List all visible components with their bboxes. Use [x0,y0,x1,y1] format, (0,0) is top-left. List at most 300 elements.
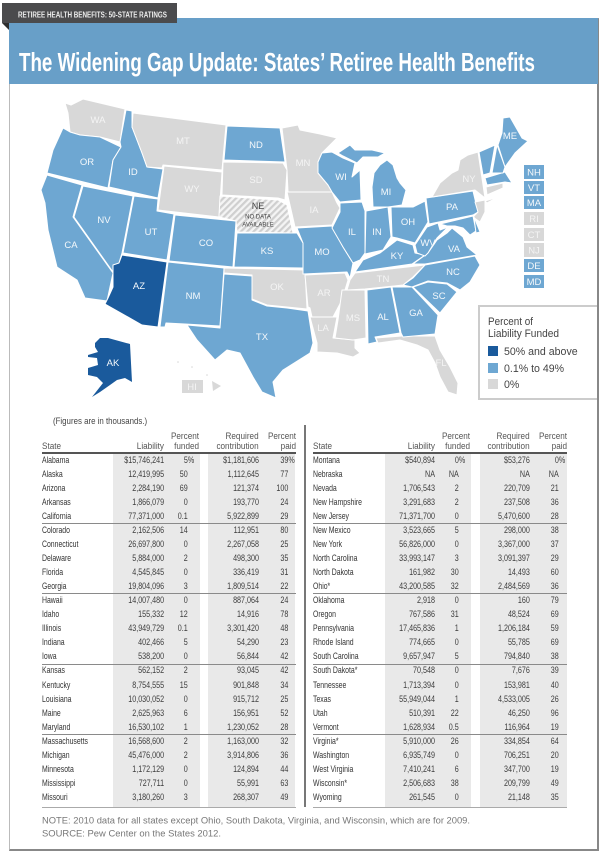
required contribution column: 5,470,600 [498,511,530,521]
required contribution column: 93,045 [237,665,259,675]
liability column: 2,918 [417,595,435,605]
state: IN: IN [372,227,382,238]
state: NM: NM [186,291,200,302]
state: IA [287,192,340,227]
percent funded column: 2 [455,497,459,507]
liability column: 12,419,995 [128,469,164,479]
state names column [313,455,362,802]
state names column: Iowa [42,651,57,661]
state: IL: IL [348,227,356,238]
state names column: Missouri [42,792,68,802]
state names column: Idaho [42,609,59,619]
liability column: 19,804,096 [128,581,164,591]
small northeast state boxes: RI [529,214,539,225]
percent paid column: 29 [551,553,559,563]
table: Alabama to Missouri [42,431,296,808]
liability column: 2,284,190 [132,483,164,493]
state names column: Maryland [42,722,70,732]
required contribution column: 3,301,420 [227,623,259,633]
required contribution column: 3,091,397 [498,553,530,563]
state: NY: NY [462,174,476,185]
liability column: 9,657,947 [403,651,435,661]
state names column: Mississippi [42,778,75,788]
required contribution column: $53,276 [504,455,530,465]
percent funded column: 3 [184,581,188,591]
state names column: Colorado [42,525,70,535]
state: OR: OR [80,157,94,168]
state: AZ: AZ [133,281,145,292]
percent funded column: 0 [184,651,188,661]
legend panel: 0% [504,379,520,391]
state names column: Nebraska [313,469,342,479]
state names column: Virginia* [313,736,339,746]
state names column: Rhode Island [313,637,354,647]
percent funded column: 15 [180,680,188,690]
state names column: North Dakota [313,567,354,577]
state names column: Delaware [42,553,71,563]
percent funded column: 0 [455,511,459,521]
state names column: Georgia [42,581,67,591]
percent funded column: 2 [455,483,459,493]
required contribution column: 298,000 [504,525,530,535]
state: MO [297,226,353,278]
state names column: Michigan [42,750,70,760]
required contribution column: 124,894 [233,764,259,774]
state: NC: NC [446,267,460,278]
state: WA [65,99,125,142]
liability column: 767,586 [409,609,435,619]
percent paid column: 77 [280,469,288,479]
liability column: 77,371,000 [128,511,164,521]
state: OH: OH [401,217,415,228]
state: KS [234,233,303,268]
state: MN [282,125,337,192]
percent paid column: 35 [280,553,288,563]
state: AK: AK [107,358,120,369]
section tag [2,3,177,30]
state: NY [432,152,498,203]
state: IA: IA [310,205,319,216]
percent paid column: 36 [551,581,559,591]
state names column: Florida [42,567,63,577]
state: ME [498,117,528,167]
state: FL [376,336,458,395]
state: NE, no data [219,196,293,233]
state names column: Vermont [313,722,339,732]
state names column: Alaska [42,469,63,479]
percent paid column: 49 [551,778,559,788]
liability column: 774,665 [409,637,435,647]
required contribution column: 220,709 [504,483,530,493]
liability column: 26,697,800 [128,539,164,549]
percent funded column: 38 [451,778,459,788]
state names column: Arizona [42,483,65,493]
table header: Percent [442,431,470,442]
required contribution column: 160 [518,595,530,605]
percent paid column: 36 [551,497,559,507]
required contribution column: 794,840 [504,651,530,661]
liability column: 1,866,079 [132,497,164,507]
required contribution column: 1,809,514 [227,581,259,591]
percent paid column: 24 [280,497,288,507]
state names column: West Virginia [313,764,353,774]
percent paid column: 100 [276,483,288,493]
state: NE, no data: NO DATA [245,214,271,220]
percent funded column: 0 [184,539,188,549]
percent funded column: 50 [180,469,188,479]
required contribution column: 237,508 [504,497,530,507]
percent funded column: 0 [455,637,459,647]
state: LA [310,317,360,357]
state names column: Massachusetts [42,736,88,746]
percent paid column: 23 [280,637,288,647]
liability column: 402,466 [138,637,164,647]
state: NH [492,145,505,173]
state names column: Illinois [42,623,61,633]
small northeast state boxes: NH [527,168,541,178]
liability column: 2,506,683 [403,778,435,788]
percent paid column: 79 [551,595,559,605]
small northeast state boxes [524,165,544,288]
state: WI: WI [335,172,347,183]
legend panel: Percent of [488,316,534,328]
table header: paid [552,441,567,452]
state names column: Nevada [313,483,337,493]
state: GA [392,287,438,337]
required contribution column: 116,964 [505,722,530,732]
footnote: note and source: NOTE: 2010 data for all states except Ohio, South Dakota, Virginia, and Wisconsin, which are for 2009. [42,816,470,826]
percent funded column: 1 [184,722,188,732]
percent funded column: 2 [184,736,188,746]
percent funded column: 3 [455,553,459,563]
required contribution column: 498,300 [233,553,259,563]
state: CT and RI [486,183,503,195]
liability column: 6,935,749 [403,750,435,760]
table header: Liability [137,441,164,452]
percent funded column: 3 [184,792,188,802]
state: NE, no data: AVAILABLE [242,222,274,228]
state: MA [485,172,512,185]
required contribution column: 14,916 [237,609,259,619]
required contribution column: 193,770 [233,497,259,507]
state: TN [347,265,425,290]
state: FL: FL [435,358,447,369]
state names column: Minnesota [42,764,74,774]
state: WV [415,223,448,256]
percent paid column: 48 [280,623,288,633]
percent funded column: NA [449,469,459,479]
state names column: Wisconsin* [313,778,347,788]
liability column: 70,548 [413,665,435,675]
required contribution column: 1,163,000 [227,736,259,746]
state: NC [403,256,480,290]
liability column: 55,949,044 [399,694,435,704]
state: SD: SD [249,175,263,186]
percent funded column: 0 [455,539,459,549]
percent funded column: 5 [455,525,459,535]
state: MS [335,290,366,340]
percent funded column: 0 [184,778,188,788]
table header: contribution [488,441,530,452]
map of the United States [42,100,544,397]
percent paid column: 40 [551,680,559,690]
table: Montana to Wyoming: 0% [555,455,565,465]
state: WY [158,166,222,217]
liability column: 4,545,845 [132,567,164,577]
state: MO: MO [314,247,330,258]
percent funded column: 2 [184,750,188,760]
state names column: Texas [313,694,331,704]
percent paid column: 19 [551,764,559,774]
state: CO [169,215,236,267]
state: MT [132,113,226,170]
required contribution column: 2,267,058 [227,539,259,549]
state: NV [74,186,133,272]
required contribution column: 14,493 [508,567,530,577]
title banner [9,18,598,84]
table header: Liability [408,441,435,452]
required contribution column: 1,112,645 [228,469,259,479]
state: AK [88,338,132,397]
required contribution column: 56,844 [237,651,259,661]
liability column: 3,180,260 [132,792,164,802]
required contribution column: 112,951 [234,525,259,535]
required contribution column: 915,712 [233,694,259,704]
percent funded column [178,455,194,802]
percent funded column: 69 [180,483,188,493]
percent funded column: 0 [455,792,459,802]
legend panel: 50% and above [504,346,578,358]
state: VA: VA [448,244,461,255]
required contribution column: 7,676 [512,665,530,675]
required contribution column: 1,230,052 [227,722,259,732]
table header [42,431,296,452]
percent paid column: 60 [551,567,559,577]
percent funded column: 0.1 [178,511,188,521]
state: OK: OK [270,282,285,293]
state: WV: WV [420,238,436,249]
liability column: $15,746,241 [124,455,164,465]
legend panel [478,305,597,400]
state names column: Arkansas [42,497,71,507]
state: SD [222,162,287,200]
percent funded column: 5 [455,651,459,661]
small northeast state boxes: CT [528,230,541,241]
state: PA: PA [446,202,459,213]
liability column: 10,030,052 [128,694,164,704]
percent paid column: 69 [551,637,559,647]
required contribution column: 48,524 [508,609,530,619]
percent funded column: 2 [184,665,188,675]
percent paid column: 25 [280,694,288,704]
state: CA: CA [64,240,78,251]
percent funded column: 26 [451,736,459,746]
state names column: Kansas [42,665,65,675]
state: AZ [105,255,167,327]
required contribution column: 55,785 [508,637,530,647]
liability column: 3,291,683 [403,497,435,507]
percent funded column: 30 [451,567,459,577]
percent paid column: 21 [551,483,559,493]
required contribution column: 121,374 [233,483,259,493]
required contribution column: 156,951 [233,708,259,718]
state: HI [177,361,221,393]
state: TX [187,274,313,398]
percent paid column: 38 [551,651,559,661]
liability column: 727,711 [139,778,164,788]
percent paid column: 22 [280,581,288,591]
state names column: Washington [313,750,349,760]
state: UT [123,196,174,260]
liability column: 562,152 [138,665,164,675]
liability column: 1,628,934 [403,722,435,732]
state names column: New Mexico [313,525,351,535]
liability column: 17,465,836 [399,623,435,633]
required contribution column: 887,064 [233,595,259,605]
liability column: 2,625,963 [132,708,164,718]
state: IN [365,207,391,254]
table caption: (Figures are in thousands.) [53,415,147,426]
table header: Required [226,431,259,442]
state: SC: SC [432,291,446,302]
state: ID: ID [128,167,138,178]
state names column: South Dakota* [313,665,357,675]
state: GA: GA [409,308,424,319]
required contribution column: 706,251 [504,750,530,760]
state: NE, no data: NE [252,201,264,211]
table header: Required [497,431,530,442]
table header: Percent [539,431,567,442]
liability column: 16,530,102 [128,722,164,732]
percent paid column: 49 [280,792,288,802]
percent paid column: 64 [551,736,559,746]
state: ME: ME [503,131,517,142]
table: Alabama to Missouri: 5% [184,455,194,465]
percent paid column: 42 [280,651,288,661]
state names column: South Carolina [313,651,359,661]
percent paid column: 44 [280,764,288,774]
state names column: California [42,511,71,521]
state: WY: WY [184,184,200,195]
table: Montana to Wyoming: 0% [455,455,465,465]
state: VA [413,228,477,264]
liability column: 43,949,729 [128,623,164,633]
state names column: Tennessee [313,680,346,690]
state: DE [474,217,480,233]
small northeast state boxes: VT [528,183,540,194]
table header: funded [445,441,470,452]
percent paid column: 19 [551,722,559,732]
liability column: 16,568,600 [128,736,164,746]
footnote: note and source [42,816,470,840]
percent funded column: 12 [180,609,188,619]
required contribution column: 54,290 [237,637,259,647]
state: MI: MI [381,187,391,198]
state: WA: WA [91,115,106,126]
percent paid column: NA [549,469,559,479]
state: KS: KS [261,246,273,257]
liability column: 538,200 [138,651,164,661]
liability column: 5,910,000 [403,736,435,746]
percent paid column: 20 [551,750,559,760]
small northeast state boxes: MD [527,277,542,288]
liability column [124,455,164,802]
percent paid column: 42 [280,665,288,675]
percent funded column: 5 [184,637,188,647]
percent paid column [549,455,565,802]
percent funded column: 31 [451,609,459,619]
required contribution column [223,455,259,802]
required contribution column: 5,922,899 [227,511,259,521]
liability column [399,455,435,802]
percent paid column: 28 [551,511,559,521]
table header [313,431,567,452]
state names column: Kentucky [42,680,70,690]
liability column: 8,754,555 [132,680,164,690]
liability column: 2,162,506 [132,525,164,535]
state: OK [224,268,307,309]
percent funded column: 0 [455,665,459,675]
liability column: 1,706,543 [403,483,435,493]
percent paid column: 69 [551,609,559,619]
percent funded column: 0.5 [449,722,459,732]
liability column: 5,884,000 [132,553,164,563]
percent funded column: 14 [180,525,188,535]
state: MT: MT [176,136,190,147]
state: TN: TN [377,274,389,285]
percent funded column: 0 [455,680,459,690]
percent paid column: 25 [280,539,288,549]
percent funded column: 6 [184,708,188,718]
small northeast state boxes: NJ [528,246,540,256]
state: SC [413,282,457,313]
state names column: Maine [42,708,61,718]
percent paid column: 32 [280,736,288,746]
required contribution column [498,455,530,802]
state: OH [391,201,428,243]
percent funded column: 0 [184,497,188,507]
percent funded column: 0 [455,595,459,605]
required contribution column: 3,914,806 [227,750,259,760]
state: TX: TX [256,332,269,343]
liability column: 14,007,480 [128,595,164,605]
liability column: 33,993,147 [399,553,435,563]
percent paid column: 38 [551,525,559,535]
percent funded column: 22 [451,708,459,718]
required contribution column: NA [520,469,530,479]
state: UT: UT [145,227,158,238]
state: ND: ND [249,140,263,151]
percent funded column: 0 [184,764,188,774]
state names column: New Hampshire [313,497,362,507]
liability column: 1,172,129 [132,764,164,774]
state: HI: HI [187,382,197,393]
state: KY: KY [391,251,404,262]
percent paid column: 34 [280,680,288,690]
percent funded column [449,455,465,802]
state names column: Alabama [42,455,69,465]
required contribution column: 55,991 [237,778,259,788]
table header: paid [281,441,296,452]
liability column: 1,713,394 [403,680,435,690]
required contribution column: 901,848 [233,680,259,690]
state: OR [47,128,121,188]
percent funded column: 2 [184,553,188,563]
percent paid column: 39% [280,455,294,465]
table header: State [313,441,332,452]
liability column: 510,391 [409,708,435,718]
required contribution column: 347,700 [504,764,530,774]
